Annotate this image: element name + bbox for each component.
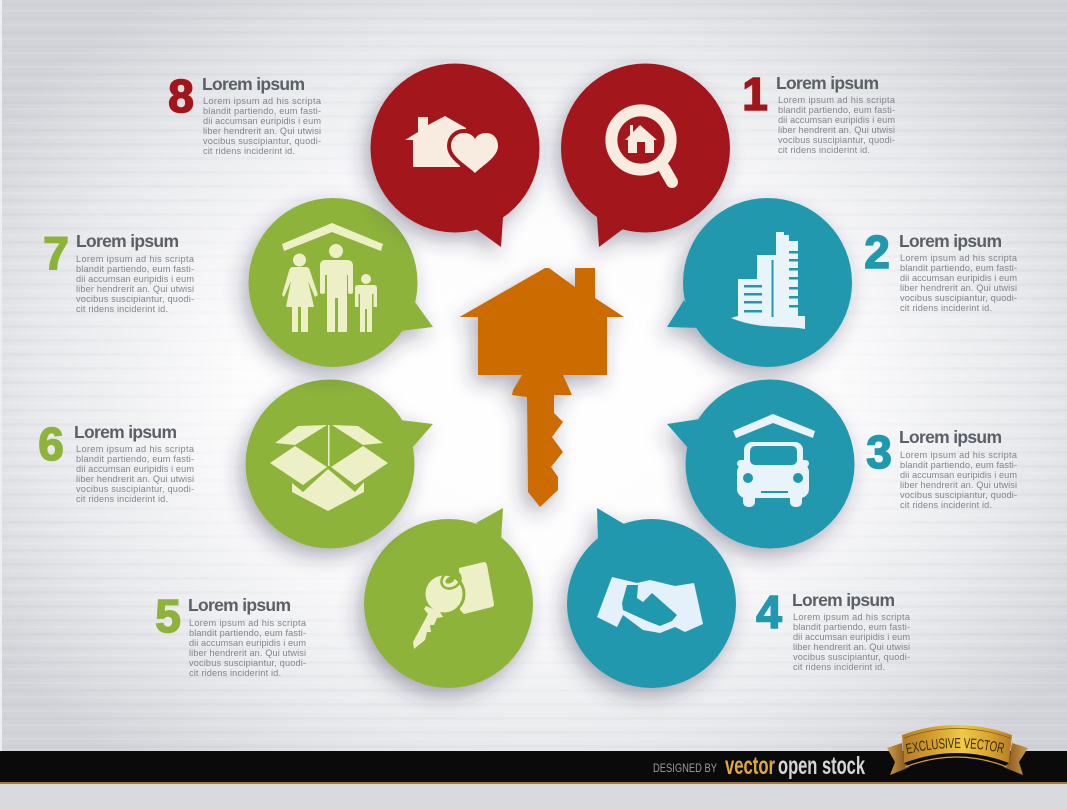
- text block 4: [756, 586, 911, 672]
- center icon: house key: [460, 268, 624, 507]
- text block 8: [168, 70, 322, 156]
- body 4: Lorem ipsum ad his scripta: [793, 612, 911, 622]
- body 2: vocibus suscipiantur, quodi-: [900, 293, 1017, 303]
- number 3: 3: [866, 426, 892, 478]
- text block 3: [866, 426, 1018, 510]
- body 1: cit ridens inciderint id.: [778, 145, 870, 155]
- heading 8: Lorem ipsum: [202, 74, 305, 94]
- body 3: liber hendrerit an. Qui utwisi: [900, 480, 1017, 490]
- body 8: liber hendrerit an. Qui utwisi: [203, 126, 321, 136]
- number 4: 4: [756, 586, 782, 638]
- body 7: cit ridens inciderint id.: [76, 304, 168, 314]
- text block 5: [155, 590, 307, 678]
- footer credit: [653, 752, 865, 780]
- body 1: dii accumsan euripidis i eum: [778, 115, 895, 125]
- body 5: cit ridens inciderint id.: [189, 668, 281, 678]
- body 4: cit ridens inciderint id.: [793, 662, 885, 672]
- icon: handshake: [597, 577, 703, 633]
- number 2: 2: [864, 226, 890, 278]
- body 8: blandit partiendo, eum fasti-: [203, 106, 321, 116]
- heading 7: Lorem ipsum: [76, 231, 179, 251]
- body 6: [76, 444, 195, 504]
- icon: car under roof: [733, 414, 815, 507]
- body 1: liber hendrerit an. Qui utwisi: [778, 125, 895, 135]
- body 5: blandit partiendo, eum fasti-: [189, 628, 306, 638]
- bubble 5: key and tag: [364, 508, 533, 688]
- footer credit: open stock: [778, 752, 865, 780]
- footer credit: vector: [725, 752, 775, 780]
- bubble 1: search home: [561, 64, 730, 247]
- text block 2: [864, 226, 1018, 313]
- number 7: 7: [43, 227, 69, 279]
- heading 4: Lorem ipsum: [792, 590, 895, 610]
- body 8: Lorem ipsum ad his scripta: [203, 96, 322, 106]
- ribbon badge: exclusive vector: EXCLUSIVE VECTOR: [906, 738, 1004, 754]
- body 5: dii accumsan euripidis i eum: [189, 638, 306, 648]
- body 5: vocibus suscipiantur, quodi-: [189, 658, 306, 668]
- bubble 8: home love: [370, 64, 540, 247]
- icon: house with heart: [405, 116, 498, 173]
- footer bar: [0, 751, 1067, 810]
- body 6: liber hendrerit an. Qui utwisi: [76, 474, 194, 484]
- number 8: 8: [168, 70, 194, 122]
- bubble 4: handshake: [567, 508, 736, 688]
- body 1: blandit partiendo, eum fasti-: [778, 105, 895, 115]
- text block 1: [742, 68, 896, 155]
- body 3: dii accumsan euripidis i eum: [900, 470, 1017, 480]
- bubble 6: open box: [246, 380, 433, 548]
- body 7: liber hendrerit an. Qui utwisi: [76, 284, 194, 294]
- number 1: 1: [742, 68, 768, 120]
- body 5: [189, 618, 307, 678]
- body 6: Lorem ipsum ad his scripta: [76, 444, 195, 454]
- body 4: liber hendrerit an. Qui utwisi: [793, 642, 910, 652]
- body 3: [900, 450, 1018, 510]
- heading 2: Lorem ipsum: [899, 231, 1002, 251]
- body 2: liber hendrerit an. Qui utwisi: [900, 283, 1017, 293]
- icon: family under roof: [282, 223, 383, 332]
- body 8: dii accumsan euripidis i eum: [203, 116, 321, 126]
- heading 1: Lorem ipsum: [776, 73, 879, 93]
- body 2: blandit partiendo, eum fasti-: [900, 263, 1017, 273]
- body 7: [76, 254, 195, 314]
- body 3: cit ridens inciderint id.: [900, 500, 992, 510]
- body 3: blandit partiendo, eum fasti-: [900, 460, 1017, 470]
- body 6: dii accumsan euripidis i eum: [76, 464, 194, 474]
- body 2: cit ridens inciderint id.: [900, 303, 992, 313]
- body 2: dii accumsan euripidis i eum: [900, 273, 1017, 283]
- heading 6: Lorem ipsum: [74, 422, 177, 442]
- body 3: Lorem ipsum ad his scripta: [900, 450, 1018, 460]
- body 2: Lorem ipsum ad his scripta: [900, 253, 1018, 263]
- body 6: cit ridens inciderint id.: [76, 494, 168, 504]
- text block 6: [38, 418, 195, 504]
- icon: magnifier with house: [611, 110, 672, 182]
- body 8: cit ridens inciderint id.: [203, 146, 295, 156]
- body 8: [203, 96, 322, 156]
- body 5: Lorem ipsum ad his scripta: [189, 618, 307, 628]
- number 6: 6: [38, 418, 64, 470]
- number 5: 5: [155, 590, 181, 642]
- body 5: liber hendrerit an. Qui utwisi: [189, 648, 306, 658]
- text block 7: [43, 227, 195, 314]
- body 1: [778, 95, 896, 155]
- body 1: vocibus suscipiantur, quodi-: [778, 135, 895, 145]
- body 7: Lorem ipsum ad his scripta: [76, 254, 195, 264]
- body 4: blandit partiendo, eum fasti-: [793, 622, 910, 632]
- heading 5: Lorem ipsum: [188, 595, 291, 615]
- heading 3: Lorem ipsum: [899, 427, 1002, 447]
- icon: open box: [270, 425, 388, 511]
- body 2: [900, 253, 1018, 313]
- bubble 7: family: [248, 198, 433, 367]
- bubble 2: buildings: [667, 198, 852, 367]
- body 8: vocibus suscipiantur, quodi-: [203, 136, 321, 146]
- body 7: blandit partiendo, eum fasti-: [76, 264, 194, 274]
- body 4: vocibus suscipiantur, quodi-: [793, 652, 910, 662]
- ribbon badge: exclusive vector: [887, 725, 1028, 775]
- body 4: [793, 612, 911, 672]
- bubble 3: car garage: [667, 380, 854, 548]
- icon: key with tag: [413, 562, 494, 649]
- body 3: vocibus suscipiantur, quodi-: [900, 490, 1017, 500]
- body 1: Lorem ipsum ad his scripta: [778, 95, 896, 105]
- body 7: dii accumsan euripidis i eum: [76, 274, 194, 284]
- body 6: vocibus suscipiantur, quodi-: [76, 484, 194, 494]
- body 6: blandit partiendo, eum fasti-: [76, 454, 194, 464]
- body 4: dii accumsan euripidis i eum: [793, 632, 910, 642]
- footer credit: DESIGNED BY: [653, 761, 717, 775]
- icon: buildings: [731, 232, 805, 329]
- body 7: vocibus suscipiantur, quodi-: [76, 294, 194, 304]
